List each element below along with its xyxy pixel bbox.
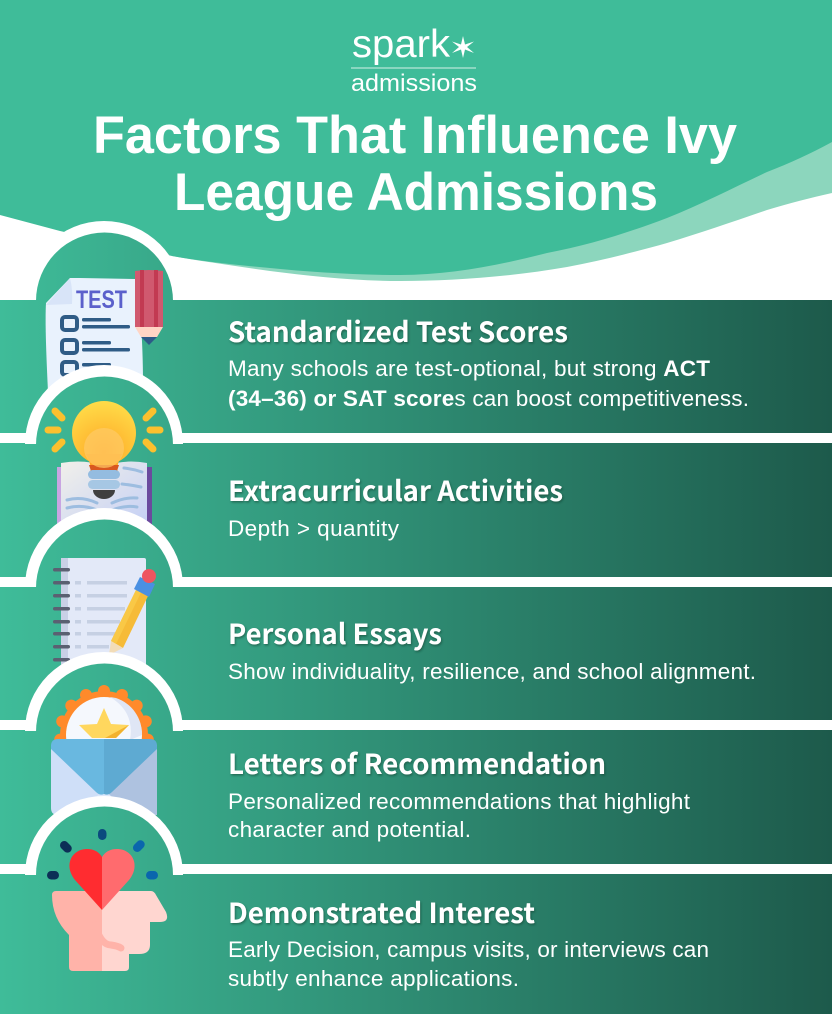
arch 1 — [25, 221, 183, 301]
panel: personal essays — [0, 508, 832, 720]
body text: Show individuality, resilience, and school alignment. — [228, 659, 756, 684]
panel: letters of recommendation — [0, 652, 832, 864]
icon: notebook and pencil — [53, 558, 156, 670]
panel: extracurricular activities — [0, 365, 832, 577]
logo: spark — [352, 23, 451, 66]
icon: badge and envelope — [51, 685, 157, 815]
logo — [351, 23, 477, 97]
header background — [0, 0, 832, 275]
icon: light bulb and book — [48, 401, 160, 525]
title: League Admissions — [174, 163, 658, 222]
body text: Personalized recommendations that highlight — [228, 789, 691, 814]
bulb — [72, 401, 136, 465]
body text: Depth > quantity — [228, 516, 400, 541]
body text: (34–36) or SAT scores can boost competitiveness. — [228, 386, 749, 411]
arch 2 — [25, 365, 183, 445]
heart — [69, 849, 102, 910]
heading: Letters of Recommendation — [228, 743, 606, 783]
dots — [47, 829, 158, 880]
body text: subtly enhance applications. — [228, 966, 519, 991]
pencil — [109, 569, 156, 655]
body text: character and potential. — [228, 817, 471, 842]
heading: Demonstrated Interest — [228, 892, 535, 932]
arch 4 — [25, 652, 183, 732]
heading: Extracurricular Activities — [228, 470, 563, 510]
body text — [228, 789, 691, 842]
body text — [228, 937, 709, 991]
body text — [228, 356, 749, 411]
icon: head with heart — [47, 829, 167, 971]
icon: test paper and pencil — [46, 270, 163, 392]
body text: Many schools are test-optional, but strong ACT — [228, 356, 710, 381]
title: Factors That Influence Ivy — [93, 106, 738, 165]
title — [93, 106, 738, 222]
heading: Personal Essays — [228, 613, 442, 653]
panel: demonstrated interest — [0, 796, 832, 1014]
panel: standardized test scores — [0, 221, 832, 433]
heading: Standardized Test Scores — [228, 311, 568, 351]
body text: Early Decision, campus visits, or interviews can — [228, 937, 709, 962]
light rays — [48, 411, 160, 449]
logo star — [452, 36, 474, 58]
arch 3 — [25, 508, 183, 588]
logo: admissions — [351, 70, 477, 97]
header accent wave — [172, 130, 832, 281]
icon: red pencil — [135, 270, 163, 345]
icon: test paper and pencil: TEST — [76, 286, 127, 314]
arch 5 — [25, 796, 183, 875]
